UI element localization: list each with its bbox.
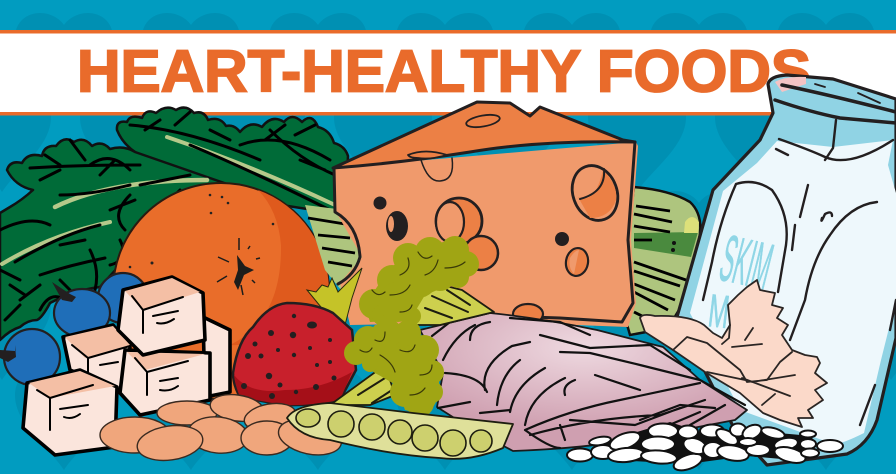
milk jar [677, 75, 896, 465]
tofu back left [63, 325, 130, 392]
kale stems [167, 137, 335, 205]
salmon fillet [420, 313, 747, 451]
jar contours [703, 120, 896, 425]
kale ribs [0, 112, 335, 320]
berry stems [0, 282, 76, 362]
upper floret curls [372, 252, 465, 312]
cheese top [333, 102, 635, 168]
beans backing [600, 422, 815, 464]
jar lid pink [775, 77, 806, 92]
strawberry shadow [234, 372, 352, 405]
kale [0, 108, 348, 340]
jar rim [775, 85, 896, 123]
tofu top [118, 277, 205, 355]
cheese holes [465, 113, 501, 129]
cucumber [620, 187, 700, 335]
jar label: M [706, 284, 732, 338]
orange [113, 183, 329, 399]
jar label [706, 221, 780, 338]
lower stalk [330, 365, 395, 405]
jar inner [690, 140, 896, 444]
tofu back right [203, 317, 230, 397]
cheese outline [334, 142, 635, 322]
upper floret [359, 236, 479, 326]
title: HEART-HEALTHY FOODS [77, 38, 811, 104]
orange shadow side [230, 190, 329, 345]
cheese front [333, 142, 638, 327]
pasta folds [673, 325, 795, 405]
lower floret [344, 319, 444, 417]
strawberry leaf [307, 268, 362, 325]
cheese [333, 102, 638, 327]
fillet lines [432, 318, 745, 448]
celery behind cheese [305, 205, 368, 295]
pea pod [287, 403, 513, 459]
lower floret curls [360, 332, 432, 395]
almonds [100, 391, 345, 464]
bowtie pasta [640, 280, 827, 427]
strawberry [233, 268, 362, 405]
milk jar: SKIM [714, 221, 780, 303]
upper stalk [412, 282, 494, 325]
blueberries [0, 273, 148, 385]
jar body [677, 75, 896, 465]
strawberry seeds [241, 314, 336, 399]
title banner [0, 30, 896, 116]
orange navel [234, 255, 254, 290]
tofu front [23, 370, 117, 455]
tofu cubes [23, 277, 230, 455]
peas [296, 409, 492, 456]
cucumber end [634, 232, 698, 257]
white beans [567, 422, 843, 474]
broccoli [330, 236, 494, 417]
tofu middle [120, 350, 210, 415]
